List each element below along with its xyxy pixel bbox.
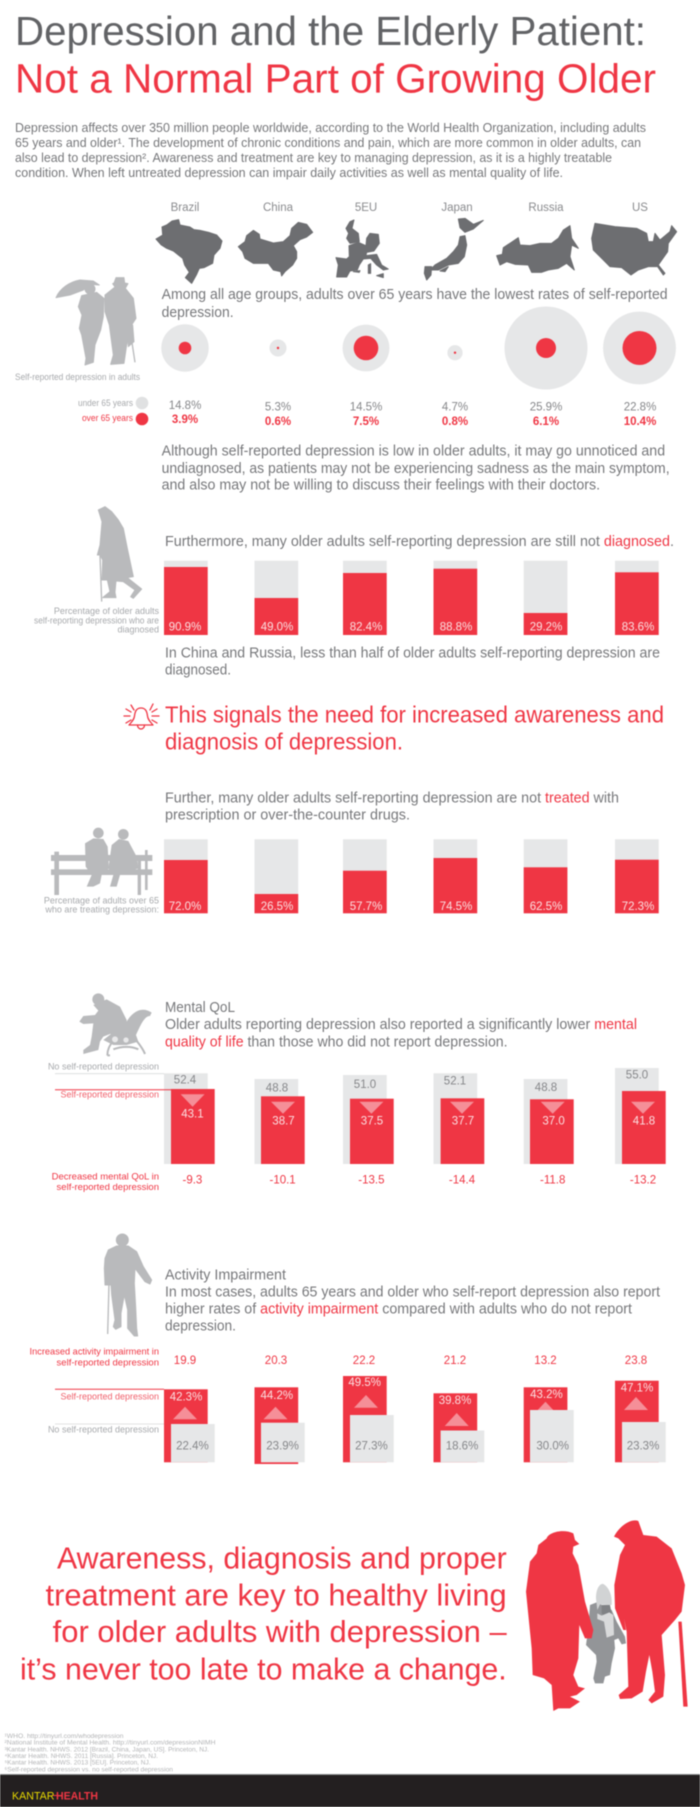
labels: activity chart: self-reported depression: [57, 1357, 159, 1368]
text: not diagnosed: Furthermore, many older adults self-reporting depression are still not diagnosed.: [165, 533, 674, 550]
bar chart: activity impairment: 43.2%: [530, 1389, 563, 1401]
bar chart: treated: 26.5%: [261, 901, 293, 913]
labels: mental QoL chart: Decreased mental QoL in: [52, 1171, 159, 1182]
label: percentage diagnosed: Percentage of older adults: [54, 606, 159, 616]
closing statement: Awareness, diagnosis and proper: [57, 1541, 507, 1575]
text: unnoticed and undiagnosed: undiagnosed, as patients may not be experiencing sadness as the main symptom,: [162, 460, 670, 477]
depression percentages: 3.9%: [172, 414, 198, 426]
bar chart: mental QoL: 52.4: [174, 1074, 197, 1086]
icon: couple with umbrella: [56, 278, 136, 365]
labels: mental QoL chart: Self-reported depression: [60, 1090, 159, 1100]
bar chart: activity impairment: [55, 1355, 666, 1464]
country labels: [171, 202, 648, 214]
text: activity impairment: [165, 1267, 661, 1335]
text: lowest rates: Among all age groups, adults over 65 years have the lowest rates of self-reported: [162, 286, 668, 303]
bar chart: diagnosed: [164, 561, 659, 635]
bar chart: activity impairment: 49.5%: [348, 1377, 381, 1389]
label: percentage diagnosed: diagnosed: [117, 625, 159, 635]
depression percentages: 6.1%: [533, 416, 559, 428]
bar chart: mental QoL: 37.7: [452, 1116, 474, 1128]
bar chart: mental QoL: -13.5: [358, 1174, 385, 1186]
bar chart: diagnosed: 83.6%: [622, 622, 654, 634]
bar chart: mental QoL: 41.8: [633, 1116, 655, 1128]
footnotes: ²National Institute of Mental Health. http://tinyurl.com/depressionNIMH: [4, 1740, 216, 1747]
depression percentages: 5.3%: [265, 402, 291, 414]
labels: activity chart: No self-reported depression: [48, 1425, 159, 1435]
label: self-reported depression in adults: Self-reported depression in adults: [15, 372, 140, 382]
bar chart: activity impairment: 20.3: [265, 1355, 287, 1367]
depression percentages: 22.8%: [624, 402, 656, 414]
label: percentage treating: [44, 895, 159, 915]
text: not treated: Further, many older adults self-reporting depression are not treated with: [165, 790, 619, 807]
bar chart: mental QoL: 55.0: [626, 1069, 648, 1081]
text: mental QoL: quality of life than those who did not report depression.: [165, 1033, 508, 1050]
bar chart: treated: [164, 839, 659, 913]
footnotes: [4, 1733, 216, 1773]
depression percentages: 0.8%: [442, 416, 468, 428]
bar chart: activity impairment: 22.4%: [176, 1440, 209, 1452]
bubble chart: self-reported depression: [161, 306, 676, 390]
labels: activity chart: [30, 1346, 159, 1435]
bar chart: activity impairment: 21.2: [444, 1355, 466, 1367]
text: activity impairment: depression.: [165, 1318, 236, 1335]
bar chart: activity impairment: 23.9%: [266, 1440, 299, 1452]
text: lowest rates: depression.: [162, 304, 234, 321]
footnotes: ¹WHO. http://tinyurl.com/whodepression: [4, 1733, 124, 1740]
closing statement: for older adults with depression –: [53, 1615, 507, 1649]
text: not treated: prescription or over-the-counter drugs.: [165, 807, 410, 824]
bar chart: activity impairment: 44.2%: [260, 1390, 293, 1402]
country labels: Russia: [528, 202, 564, 214]
title: Not a Normal Part of Growing Older: [15, 56, 656, 102]
bar chart: mental QoL: 38.7: [272, 1116, 295, 1128]
footer bar: [0, 1774, 700, 1807]
country labels: Brazil: [171, 202, 199, 214]
bar chart: treated: 62.5%: [530, 901, 562, 913]
bar chart: mental QoL: -14.4: [449, 1174, 476, 1186]
bar chart: mental QoL: 48.8: [535, 1082, 557, 1094]
bar chart: activity impairment: 30.0%: [536, 1440, 569, 1452]
text: not treated: [165, 790, 619, 824]
callout: need for awareness: [165, 702, 664, 754]
depression percentages: 14.8%: [169, 400, 201, 412]
bar chart: mental QoL: -9.3: [182, 1174, 202, 1186]
text: unnoticed and undiagnosed: Although self-reported depression is low in older adults, it may go unnoticed and: [162, 443, 665, 460]
bar chart: activity impairment: 42.3%: [170, 1392, 202, 1404]
bar chart: treated: 74.5%: [440, 901, 472, 913]
title: [15, 8, 656, 102]
bar chart: activity impairment: 19.9: [174, 1355, 196, 1367]
intro paragraph: Depression affects over 350 million people worldwide, according to the World Health Organization, including adults: [15, 120, 646, 135]
label: percentage treating: who are treating depression:: [44, 905, 159, 915]
text: activity impairment: Activity Impairment: [165, 1267, 287, 1284]
bar chart: mental QoL: 37.5: [361, 1116, 383, 1128]
bar chart: mental QoL: -13.2: [630, 1174, 656, 1186]
text: China and Russia: In China and Russia, less than half of older adults self-reporting depression are: [165, 644, 660, 661]
icon: man seated on bench: [79, 993, 152, 1055]
footnotes: ⁵Kantar Health. NHWS. 2013 [5EU]. Princeton, NJ.: [4, 1760, 151, 1767]
label: percentage treating: Percentage of adults over 65: [44, 895, 159, 905]
depression percentages: 0.6%: [265, 416, 291, 428]
bar chart: activity impairment: 13.2: [534, 1355, 557, 1367]
country labels: Japan: [441, 202, 473, 214]
bar chart: activity impairment: 23.3%: [627, 1440, 659, 1452]
intro paragraph: [15, 120, 646, 180]
text: lowest rates: [162, 286, 668, 321]
text: mental QoL: Older adults reporting depression also reported a significantly lower mental: [165, 1016, 637, 1033]
bar chart: activity impairment: 18.6%: [446, 1440, 478, 1452]
text: activity impairment: higher rates of activity impairment compared with adults who do not report: [165, 1301, 633, 1318]
country labels: 5EU: [355, 202, 377, 214]
bar chart: diagnosed: 29.2%: [530, 622, 562, 634]
intro paragraph: also lead to depression². Awareness and treatment are key to managing depression, as it is a highly treatable: [15, 150, 612, 165]
label: percentage diagnosed: [34, 606, 159, 635]
icon: man walking with cane: [104, 1234, 152, 1336]
country maps: Japan, Russia, US: [424, 218, 677, 280]
text: China and Russia: [165, 644, 660, 678]
text: mental QoL: Mental QoL: [165, 999, 235, 1016]
text: unnoticed and undiagnosed: [162, 443, 670, 494]
bar chart: diagnosed: 82.4%: [350, 622, 382, 634]
intro paragraph: 65 years and older¹. The development of chronic conditions and pain, which are more common in older adults, can: [15, 135, 641, 150]
closing statement: [20, 1541, 507, 1686]
title: Depression and the Elderly Patient:: [15, 8, 646, 54]
text: China and Russia: diagnosed.: [165, 661, 231, 678]
bar chart: treated: 72.3%: [622, 901, 654, 913]
legend: over 65 years: [82, 413, 133, 423]
logo: Kantar Health: HEALTH: [56, 1790, 98, 1802]
text: unnoticed and undiagnosed: and also may not be willing to discuss their feelings with their doctors.: [162, 477, 600, 494]
bar chart: mental QoL: -11.8: [540, 1174, 565, 1186]
icon: elderly woman with cane: [97, 507, 142, 602]
depression percentages: 14.5%: [350, 402, 382, 414]
callout: need for awareness: This signals the need for increased awareness and: [165, 702, 664, 728]
depression percentages: 4.7%: [442, 402, 468, 414]
footnotes: ⁴Kantar Health. NHWS. 2011 [Russia]. Princeton, NJ.: [4, 1753, 158, 1760]
bar chart: diagnosed: 88.8%: [440, 622, 472, 634]
bar chart: mental QoL: -10.1: [269, 1174, 296, 1186]
labels: mental QoL chart: No self-reported depression: [48, 1062, 159, 1072]
text: mental QoL: [165, 999, 637, 1050]
logo: Kantar Health: [12, 1790, 98, 1802]
closing statement: it’s never too late to make a change.: [20, 1652, 507, 1686]
labels: mental QoL chart: [48, 1062, 159, 1193]
labels: mental QoL chart: self-reported depression: [57, 1182, 159, 1193]
legend: under 65 years: [78, 398, 133, 408]
bar chart: diagnosed: 49.0%: [261, 622, 293, 634]
depression percentages: 7.5%: [353, 416, 379, 428]
depression percentages: [169, 400, 656, 428]
icon: couple on bench: [51, 828, 152, 895]
depression percentages: 25.9%: [530, 402, 562, 414]
bar chart: mental QoL: 48.8: [266, 1082, 288, 1094]
bar chart: activity impairment: 47.1%: [621, 1382, 653, 1394]
bar chart: mental QoL: 43.1: [181, 1108, 204, 1120]
bar chart: mental QoL: 51.0: [354, 1079, 376, 1091]
labels: activity chart: Self-reported depression: [60, 1391, 159, 1401]
country labels: China: [263, 202, 294, 214]
bar chart: diagnosed: 90.9%: [169, 622, 201, 634]
closing statement: treatment are key to healthy living: [46, 1578, 507, 1612]
labels: activity chart: Increased activity impairment in: [30, 1346, 159, 1357]
bar chart: activity impairment: 23.8: [625, 1355, 647, 1367]
country labels: US: [632, 202, 648, 214]
bar chart: mental QoL: 52.1: [444, 1075, 466, 1087]
depression percentages: 10.4%: [624, 416, 656, 428]
bar chart: mental QoL: [55, 1068, 666, 1186]
bar chart: treated: 72.0%: [169, 901, 201, 913]
footnotes: ⁶Self-reported depression vs. no self-reported depression: [4, 1766, 173, 1773]
text: activity impairment: In most cases, adults 65 years and older who self-report depression also report: [165, 1284, 661, 1301]
bar chart: activity impairment: 39.8%: [439, 1395, 471, 1407]
illustration: grandparents and child: [526, 1520, 688, 1711]
footnotes: ³Kantar Health. NHWS. 2012 [Brazil, China, Japan, US]. Princeton, NJ.: [4, 1746, 209, 1753]
logo: Kantar Health: KANTAR: [12, 1790, 55, 1802]
icon: alarm bell: [124, 704, 159, 729]
bar chart: treated: 57.7%: [350, 901, 382, 913]
label: percentage diagnosed: self-reporting depression who are: [34, 616, 159, 626]
intro paragraph: condition. When left untreated depression can impair daily activities as well as mental quality of life.: [15, 165, 563, 180]
legend: [78, 397, 148, 425]
callout: need for awareness: diagnosis of depression.: [165, 728, 403, 754]
bar chart: activity impairment: 22.2: [353, 1355, 375, 1367]
country maps: Brazil, China, 5EU: [156, 220, 388, 283]
bar chart: mental QoL: 37.0: [542, 1116, 565, 1128]
bar chart: activity impairment: 27.3%: [355, 1440, 388, 1452]
